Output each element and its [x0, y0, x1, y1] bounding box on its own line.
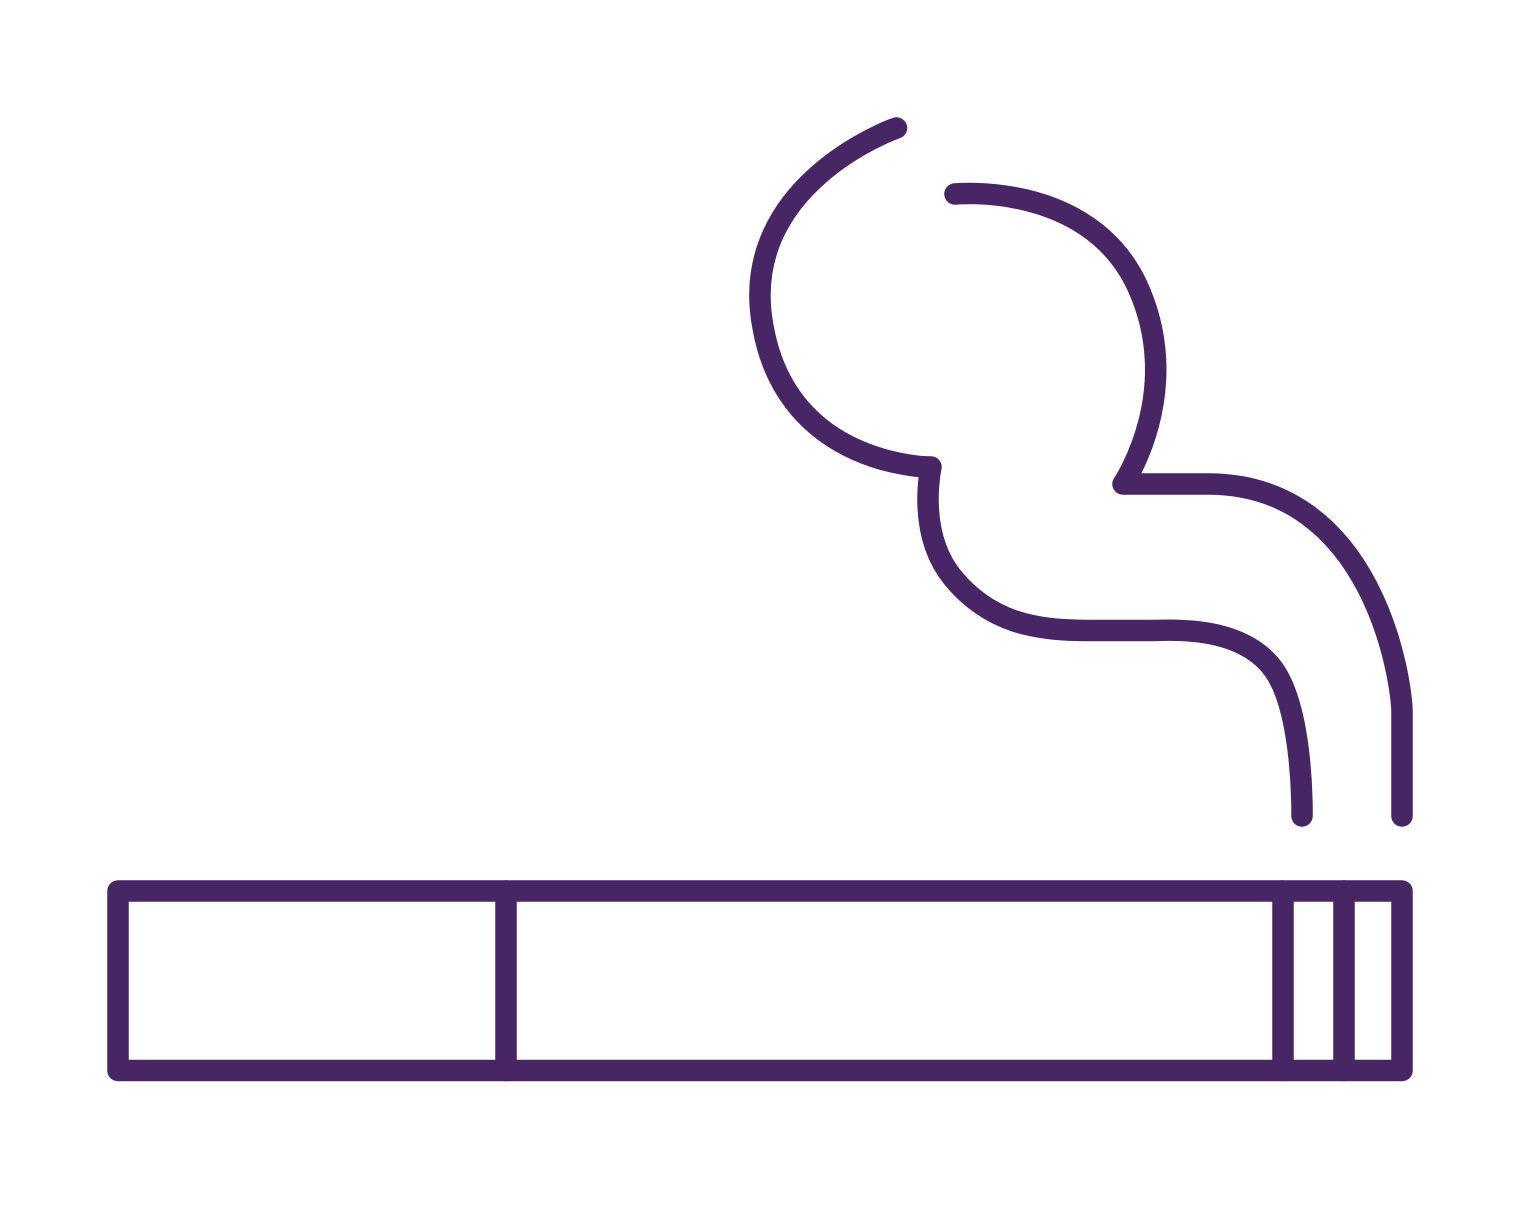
icon: right smoke wisp	[955, 193, 1402, 816]
icon: cigarette body	[118, 891, 1402, 1070]
icon: left smoke wisp	[760, 128, 1302, 816]
